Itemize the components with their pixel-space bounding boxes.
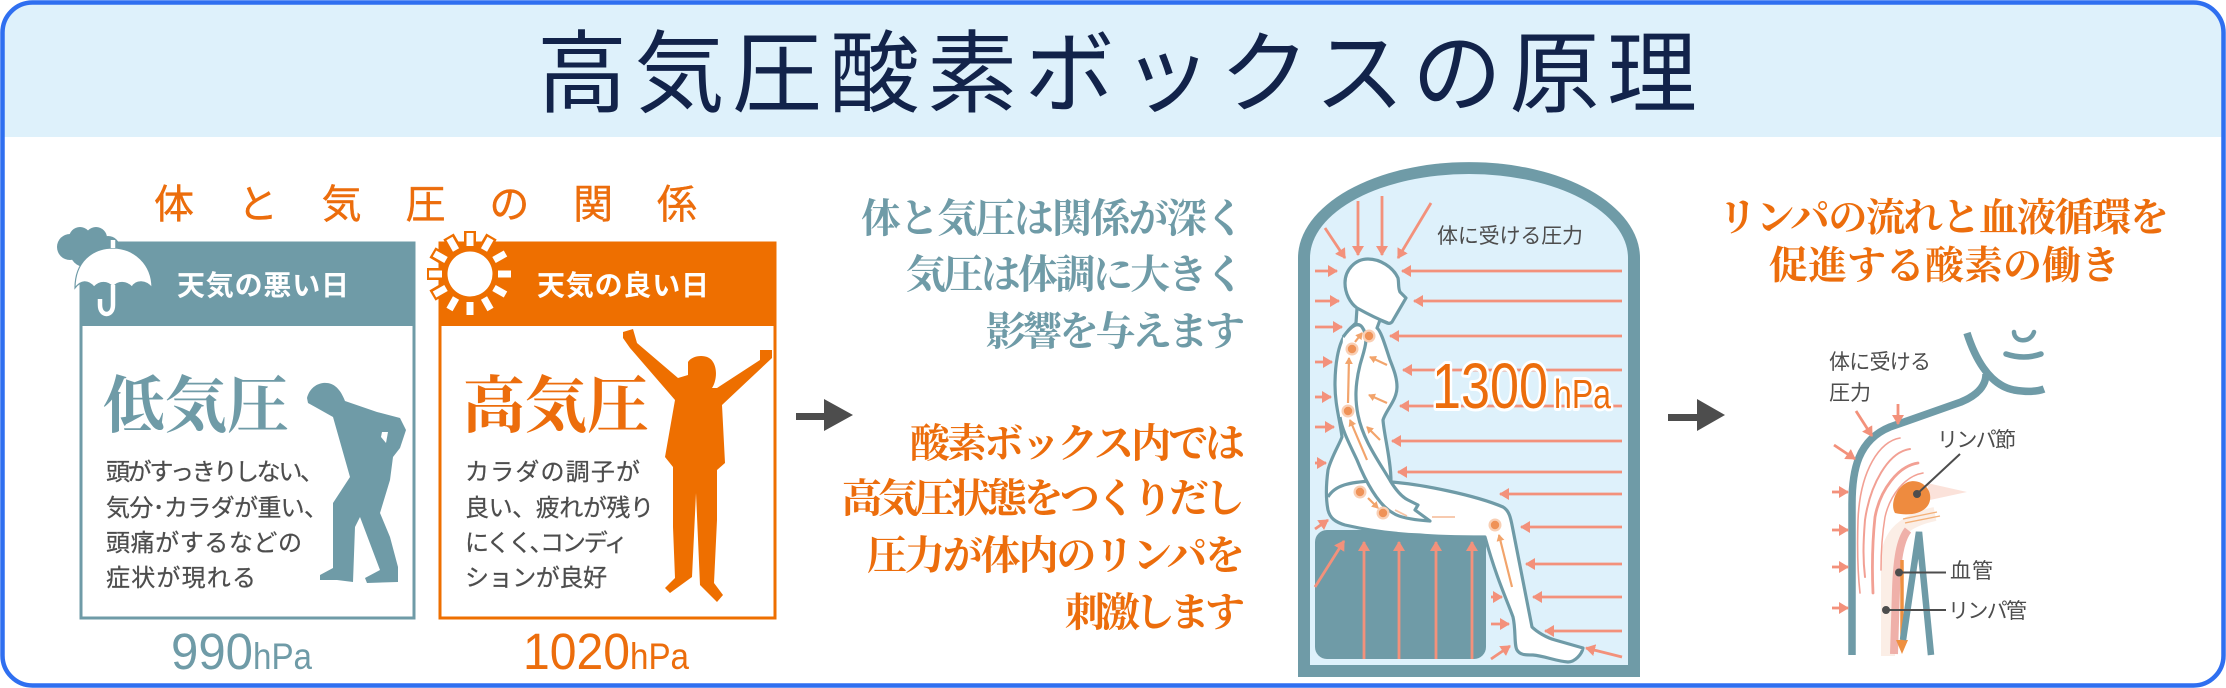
heading: lymph flow and circulation: リンパの流れと血液循環を: [1718, 197, 2169, 240]
pressure arrows: [1832, 404, 1898, 608]
symptoms text: [106, 459, 328, 592]
card header: [439, 242, 776, 326]
seated figure: [1326, 259, 1583, 662]
lymph nodes and flow: [1342, 330, 1512, 587]
pressure value: 1020: [523, 623, 630, 680]
pink lymph arcs: [1858, 438, 1923, 593]
heading: lymph flow and circulation: [1718, 197, 2169, 288]
panel: lymph diagram: [1829, 332, 2044, 656]
leader lines: [1883, 454, 1960, 613]
pressure value: [523, 623, 689, 680]
text block: pressure and health: 体と気圧は関係が深く: [861, 196, 1245, 241]
text block: oxygen box: 酸素ボックス内では: [910, 421, 1245, 466]
text block: pressure and health: 気圧は体調に大きく: [906, 252, 1245, 297]
symptoms text: 頭がすっきりしない、: [106, 459, 324, 486]
icon: sun: [427, 231, 513, 317]
condition text: ションが良好: [465, 565, 607, 592]
lymph node: [1893, 481, 1967, 514]
heading: lymph flow and circulation: 促進する酸素の働き: [1769, 245, 2120, 288]
symptoms text: 気分･カラダが重い、: [106, 495, 328, 522]
panel: high pressure card: [427, 231, 776, 680]
card header: [80, 242, 415, 326]
pressure value: [171, 623, 312, 680]
pressure value: 1300: [1432, 350, 1548, 422]
text block: oxygen box: [842, 421, 1245, 635]
icon: umbrella: [75, 240, 152, 314]
diagram labels: [1829, 351, 2027, 623]
diagram labels: 体に受ける: [1829, 351, 1931, 374]
pressure value: hPa: [253, 636, 312, 677]
low pressure label: 低気圧: [103, 373, 289, 441]
symptoms text: 頭痛がするなどの: [106, 530, 302, 557]
condition text: [465, 459, 654, 592]
title band: [0, 0, 2226, 137]
text block: pressure and health: [861, 196, 1245, 354]
text block: pressure and health: 影響を与えます: [986, 309, 1245, 354]
text block: oxygen box: 刺激します: [1065, 590, 1245, 635]
high pressure label: 高気圧: [463, 373, 649, 441]
box shell: [1298, 162, 1640, 677]
pressure value: 990: [171, 623, 253, 680]
blood vessels: [1903, 532, 1931, 655]
box interior: [1310, 174, 1628, 665]
condition text: にくく､コンディ: [465, 530, 628, 557]
icon: cloud: [57, 227, 120, 267]
lymph vessel: [1894, 512, 1940, 654]
seat: [1315, 530, 1486, 659]
symptoms text: 症状が現れる: [106, 565, 256, 592]
label: pressure on body: 体に受ける圧力: [1437, 225, 1583, 248]
condition text: カラダの調子が: [465, 459, 640, 486]
card header label: 天気の良い日: [537, 270, 709, 301]
card header label: 天気の悪い日: [177, 270, 349, 301]
pressure value: hPa: [1554, 371, 1611, 417]
condition text: 良い、疲れが残り: [465, 495, 654, 522]
icon: cheering man silhouette: [623, 329, 772, 602]
text block: oxygen box: 高気圧状態をつくりだし: [842, 476, 1245, 521]
heading: body and pressure: 体と気圧の関係: [154, 183, 697, 227]
pressure arrows: [1315, 196, 1622, 659]
diagram labels: リンパ節: [1937, 429, 2016, 452]
panel: oxygen box diagram: [1298, 162, 1640, 677]
text block: oxygen box: 圧力が体内のリンパを: [867, 533, 1245, 578]
diagram labels: リンパ管: [1948, 600, 2027, 623]
title: 高気圧酸素ボックスの原理: [537, 25, 1697, 125]
skin and neck outline: [1852, 333, 2044, 655]
card box: [81, 243, 414, 618]
card box: [440, 243, 775, 618]
diagram labels: 血管: [1950, 560, 1993, 583]
panel: low pressure card: [57, 227, 415, 680]
pale tissue band: [1888, 514, 1935, 656]
arrow: to explanation: [796, 399, 853, 431]
diagram labels: 圧力: [1829, 382, 1871, 405]
arrow: to lymph explanation: [1668, 399, 1725, 431]
icon: bent man silhouette: [307, 383, 406, 583]
pressure value: hPa: [630, 636, 689, 677]
chin detail: [2006, 332, 2041, 357]
